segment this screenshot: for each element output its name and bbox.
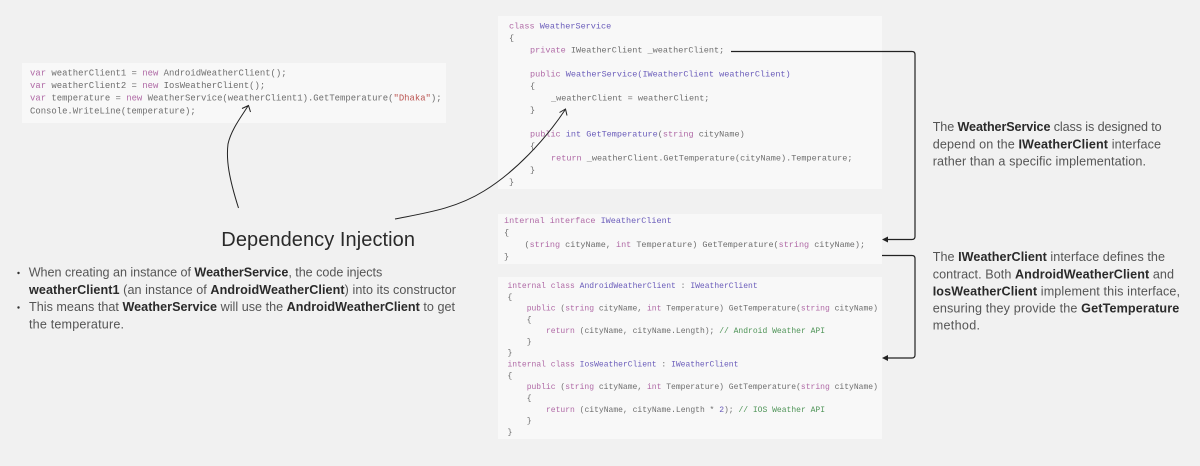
text block: dependency injection explanation: This means that WeatherService will use the AndroidWeatherClient to get xyxy=(29,300,456,314)
panel: client implementations code: { xyxy=(508,294,512,302)
panel: WeatherService class code: class WeatherService xyxy=(509,22,611,32)
panel: client implementations code: public (string cityName, int Temperature) GetTemperature(string cityName) xyxy=(527,304,878,314)
text block: IWeatherClient note: IosWeatherClient implement this interface, xyxy=(933,284,1180,298)
panel: WeatherService class code: { xyxy=(530,82,535,92)
panel: client implementations code: { xyxy=(527,316,532,325)
panel: WeatherService class code: public int GetTemperature(string cityName) xyxy=(530,130,745,140)
title: Dependency Injection xyxy=(221,229,415,251)
panel: WeatherService class code xyxy=(498,16,882,189)
panel: client implementations code: } xyxy=(527,338,532,347)
panel: client implementations code: } xyxy=(527,417,532,426)
text block: WeatherService note: depend on the IWeatherClient interface xyxy=(933,138,1161,152)
text block: IWeatherClient note: contract. Both AndroidWeatherClient and xyxy=(933,268,1174,282)
panel: WeatherService class code: } xyxy=(530,166,535,176)
text block: IWeatherClient note xyxy=(933,250,1180,332)
panel: WeatherService class code: private IWeatherClient _weatherClient; xyxy=(530,46,724,56)
text block: IWeatherClient note: method. xyxy=(933,318,980,332)
panel: client implementations code: return (cityName, cityName.Length * 2); // IOS Weather API xyxy=(546,406,825,415)
text block: IWeatherClient note: The IWeatherClient interface defines the xyxy=(933,250,1165,264)
panel: client implementations code: { xyxy=(527,394,532,404)
arrow: field to interface xyxy=(731,52,915,242)
text block: IWeatherClient note: ensuring they provide the GetTemperature xyxy=(933,302,1179,316)
panel: client implementations code: internal class AndroidWeatherClient : IWeatherClient xyxy=(508,282,758,291)
panel: IWeatherClient interface code: { xyxy=(504,228,509,238)
panel: client implementations code: } xyxy=(508,428,512,438)
panel: client usage code: var weatherClient2 = new IosWeatherClient(); xyxy=(30,81,265,91)
panel: WeatherService class code: return _weatherClient.GetTemperature(cityName).Temperature; xyxy=(551,154,853,164)
panel: WeatherService class code: { xyxy=(509,34,514,44)
panel: IWeatherClient interface code xyxy=(498,214,882,264)
panel: client implementations code: internal class IosWeatherClient : IWeatherClient xyxy=(508,360,738,370)
text block: dependency injection explanation xyxy=(17,266,456,332)
panel: client usage code: Console.WriteLine(temperature); xyxy=(30,106,196,116)
panel: client implementations code: } xyxy=(508,349,512,358)
arrow: title to client usage code xyxy=(227,106,250,208)
panel: client usage code: var temperature = new WeatherService(weatherClient1).GetTemperature("Dhaka"); xyxy=(30,94,442,104)
panel: client usage code: var weatherClient1 = new AndroidWeatherClient(); xyxy=(30,68,287,78)
panel: WeatherService class code: { xyxy=(530,142,535,152)
text block: WeatherService note xyxy=(933,120,1162,168)
text block: WeatherService note: The WeatherService class is designed to xyxy=(933,120,1162,134)
panel: client implementations code: public (string cityName, int Temperature) GetTemperature(string cityName) xyxy=(527,383,878,392)
panel: WeatherService class code: } xyxy=(509,178,514,188)
arrow: title to constructor xyxy=(395,109,567,219)
arrow: interface to implementations xyxy=(882,256,915,361)
panel: IWeatherClient interface code: (string cityName, int Temperature) GetTemperature(string cityName); xyxy=(524,240,865,250)
panel: client implementations code: { xyxy=(508,372,512,381)
text block: dependency injection explanation: weatherClient1 (an instance of AndroidWeatherClient) into its constructor xyxy=(28,283,456,297)
panel: WeatherService class code: _weatherClient = weatherClient; xyxy=(550,94,709,104)
text block: dependency injection explanation: When creating an instance of WeatherService, the code injects xyxy=(29,266,382,280)
panel: WeatherService class code: public WeatherService(IWeatherClient weatherClient) xyxy=(530,70,791,80)
panel: IWeatherClient interface code: internal interface IWeatherClient xyxy=(504,216,672,226)
text block: WeatherService note: rather than a specific implementation. xyxy=(933,154,1146,168)
panel: client implementations code: return (cityName, cityName.Length); // Android Weather API xyxy=(546,327,825,336)
panel: client usage code xyxy=(22,63,446,123)
panel: client implementations code xyxy=(498,277,882,439)
panel: WeatherService class code: } xyxy=(530,106,535,116)
panel: IWeatherClient interface code: } xyxy=(504,252,509,262)
text block: dependency injection explanation: the temperature. xyxy=(29,318,124,332)
